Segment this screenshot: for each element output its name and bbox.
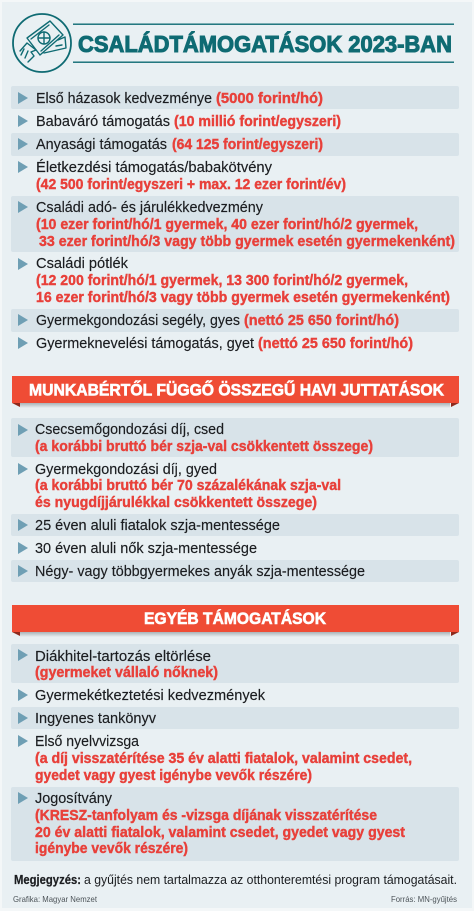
item: jogosítvány: igénybe vevők részére)	[35, 841, 188, 857]
header rules	[73, 24, 454, 63]
item: gyet	[18, 336, 413, 352]
item: gyes: Gyermekgondozási segély, gyes	[36, 313, 240, 329]
item: Családi pótlék	[18, 256, 450, 306]
item: gyet: (nettó 25 650 forint/hó)	[258, 336, 413, 352]
item: gyet: Gyermeknevelési támogatás, gyet	[36, 336, 254, 352]
note: Megjegyzés:	[14, 873, 81, 887]
item: jogosítvány: (KRESZ-tanfolyam és -vizsga díjának visszatérítése	[35, 808, 377, 824]
item: Babaváró: (10 millió forint/egyszeri)	[174, 114, 341, 130]
item: Életkezdési: Életkezdési támogatás/babakötvény	[36, 159, 273, 176]
item: Anyasági	[11, 133, 459, 156]
banner: other benefits	[12, 605, 459, 637]
panel: general benefits list	[11, 86, 459, 352]
item: Anyasági: (64 125 forint/egyszeri)	[172, 137, 323, 153]
item: 25 év	[11, 514, 459, 536]
item: gyes	[11, 309, 459, 332]
item: nyelvvizsga	[18, 734, 412, 784]
note: a gyűjtés nem tartalmazza az otthonteremtési program támogatásait.	[84, 873, 457, 887]
item: csed: Csecsemőgondozási díj, csed	[35, 422, 224, 438]
item: gyed	[18, 462, 341, 511]
item: jogosítvány: 20 év alatti fiatalok, valamint csedet, gyedet vagy gyest	[35, 825, 405, 841]
item: Első házasok: Első házasok kedvezménye	[36, 91, 212, 107]
item: gyed: (a korábbi bruttó bér 70 százalékának szja-val	[35, 478, 341, 494]
item: Első házasok: (5000 forint/hó)	[216, 91, 323, 107]
item: Családi pótlék: 16 ezer forint/hó/3 vagy több gyermek esetén gyermekenként)	[36, 290, 450, 306]
item: Családi pótlék: (12 200 forint/hó/1 gyermek, 13 300 forint/hó/2 gyermek,	[36, 273, 408, 289]
item: tankönyv	[11, 707, 459, 729]
banner: wage dependent benefits	[12, 376, 459, 408]
item: diákhitel: Diákhitel-tartozás eltörlése	[35, 649, 211, 665]
item: nyelvvizsga: (a díj visszatérítése 35 év alatti fiatalok, valamint csedet,	[35, 751, 412, 767]
item: diákhitel: (gyermeket vállaló nőknek)	[35, 665, 218, 681]
item: gyes: (nettó 25 650 forint/hó)	[244, 313, 399, 329]
item: Családi adó	[11, 196, 459, 252]
item: Babaváró: Babaváró támogatás	[36, 114, 170, 130]
credit: graphic: Grafika: Magyar Nemzet	[13, 894, 98, 904]
credit: source: Forrás: MN-gyűjtés	[391, 894, 457, 904]
item: jogosítvány	[11, 787, 459, 861]
item: Első házasok	[11, 86, 459, 109]
header	[13, 14, 454, 72]
item: Családi pótlék: Családi pótlék	[36, 256, 129, 272]
item: Életkezdési	[18, 159, 346, 193]
item: gyed: és nyugdíjjárulékkal csökkentett összege)	[35, 495, 317, 511]
item: Babaváró	[18, 114, 341, 130]
icon: hand holding banknotes	[13, 14, 71, 72]
item: csed: (a korábbi bruttó bér szja-val csökkentett összege)	[35, 439, 373, 455]
item: Családi adó: Családi adó- és járulékkedvezmény	[36, 200, 264, 216]
item: Családi adó: 33 ezer forint/hó/3 vagy több gyermek esetén gyermekenként)	[39, 234, 455, 250]
item: gyed: Gyermekgondozási díj, gyed	[35, 462, 217, 478]
item: nyelvvizsga: Első nyelvvizsga	[35, 734, 140, 750]
panel: other benefits list	[11, 644, 459, 861]
banner: other benefits: EGYÉB TÁMOGATÁSOK	[144, 609, 326, 628]
item: tankönyv: Ingyenes tankönyv	[35, 711, 157, 727]
item: négygyermekes: Négy- vagy többgyermekes anyák szja-mentessége	[35, 564, 365, 580]
item: nyelvvizsga: gyedet vagy gyest igénybe vevők részére)	[35, 768, 312, 784]
item: Anyasági: Anyasági támogatás	[36, 137, 167, 153]
item: négygyermekes	[11, 560, 459, 582]
item: 30 év: 30 éven aluli nők szja-mentessége	[35, 541, 257, 557]
item: gyermekétkeztetés: Gyermekétkeztetési kedvezmények	[35, 688, 266, 704]
panel: wage dependent list	[11, 418, 459, 582]
item: diákhitel	[11, 644, 459, 683]
item: 25 év: 25 éven aluli fiatalok szja-mentessége	[35, 518, 280, 534]
item: Családi adó: (10 ezer forint/hó/1 gyermek, 40 ezer forint/hó/2 gyermek,	[36, 217, 418, 233]
item: csed	[11, 418, 459, 457]
item: jogosítvány: Jogosítvány	[35, 791, 113, 807]
item: Életkezdési: (42 500 forint/egyszeri + max. 12 ezer forint/év)	[36, 177, 346, 193]
banner: wage dependent benefits: MUNKABÉRTŐL FÜGGŐ ÖSSZEGŰ HAVI JUTTATÁSOK	[29, 380, 444, 400]
title: CSALÁDTÁMOGATÁSOK 2023-BAN	[78, 30, 452, 57]
